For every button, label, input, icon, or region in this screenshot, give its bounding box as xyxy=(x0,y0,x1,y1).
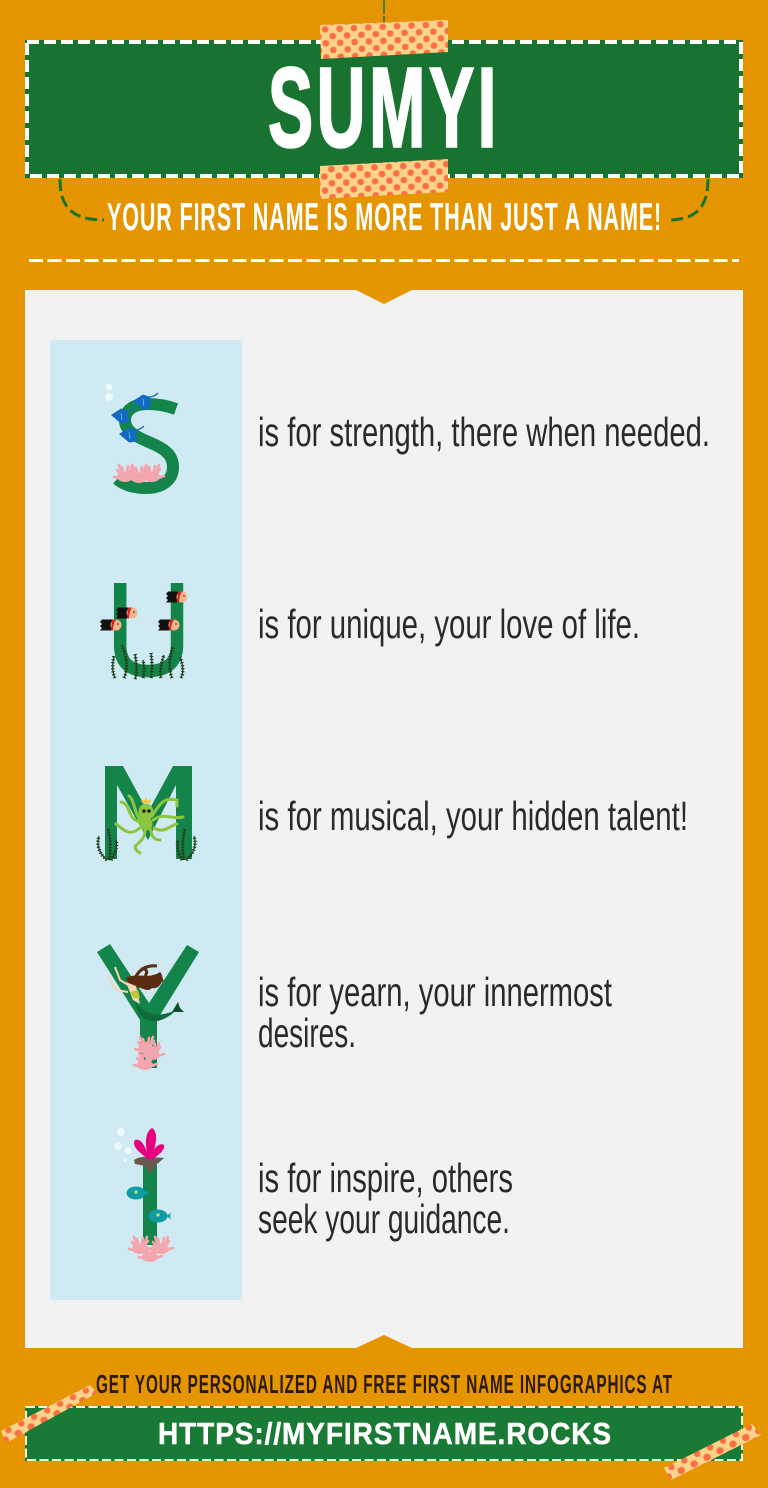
dashed divider xyxy=(29,259,739,262)
letter Y illustration xyxy=(97,944,199,1070)
title banner xyxy=(25,40,743,178)
letter U illustration xyxy=(100,583,188,679)
tape: footer left xyxy=(1,1385,97,1443)
letter I illustration xyxy=(114,1128,173,1262)
tape: footer right xyxy=(664,1424,761,1480)
hanging line xyxy=(383,0,385,24)
letter S illustration xyxy=(105,384,176,488)
right bracket xyxy=(668,179,708,220)
text: I: is for inspire, others xyxy=(258,1155,513,1201)
letter M illustration xyxy=(98,766,195,860)
text: I: seek your guidance. xyxy=(258,1196,510,1242)
text: Y: desires. xyxy=(258,1010,356,1056)
footer banner xyxy=(25,1406,743,1461)
footer url: HTTPS://MYFIRSTNAME.ROCKS xyxy=(158,1417,612,1451)
letter column xyxy=(50,340,242,1300)
text: I xyxy=(258,1155,513,1242)
text: Y: is for yearn, your innermost xyxy=(258,969,612,1015)
title: SUMYI xyxy=(268,44,500,170)
left bracket xyxy=(60,179,104,220)
main panel xyxy=(25,290,743,1348)
tape: bottom xyxy=(320,159,448,199)
text: Y xyxy=(258,969,612,1056)
tape: top xyxy=(320,20,448,59)
